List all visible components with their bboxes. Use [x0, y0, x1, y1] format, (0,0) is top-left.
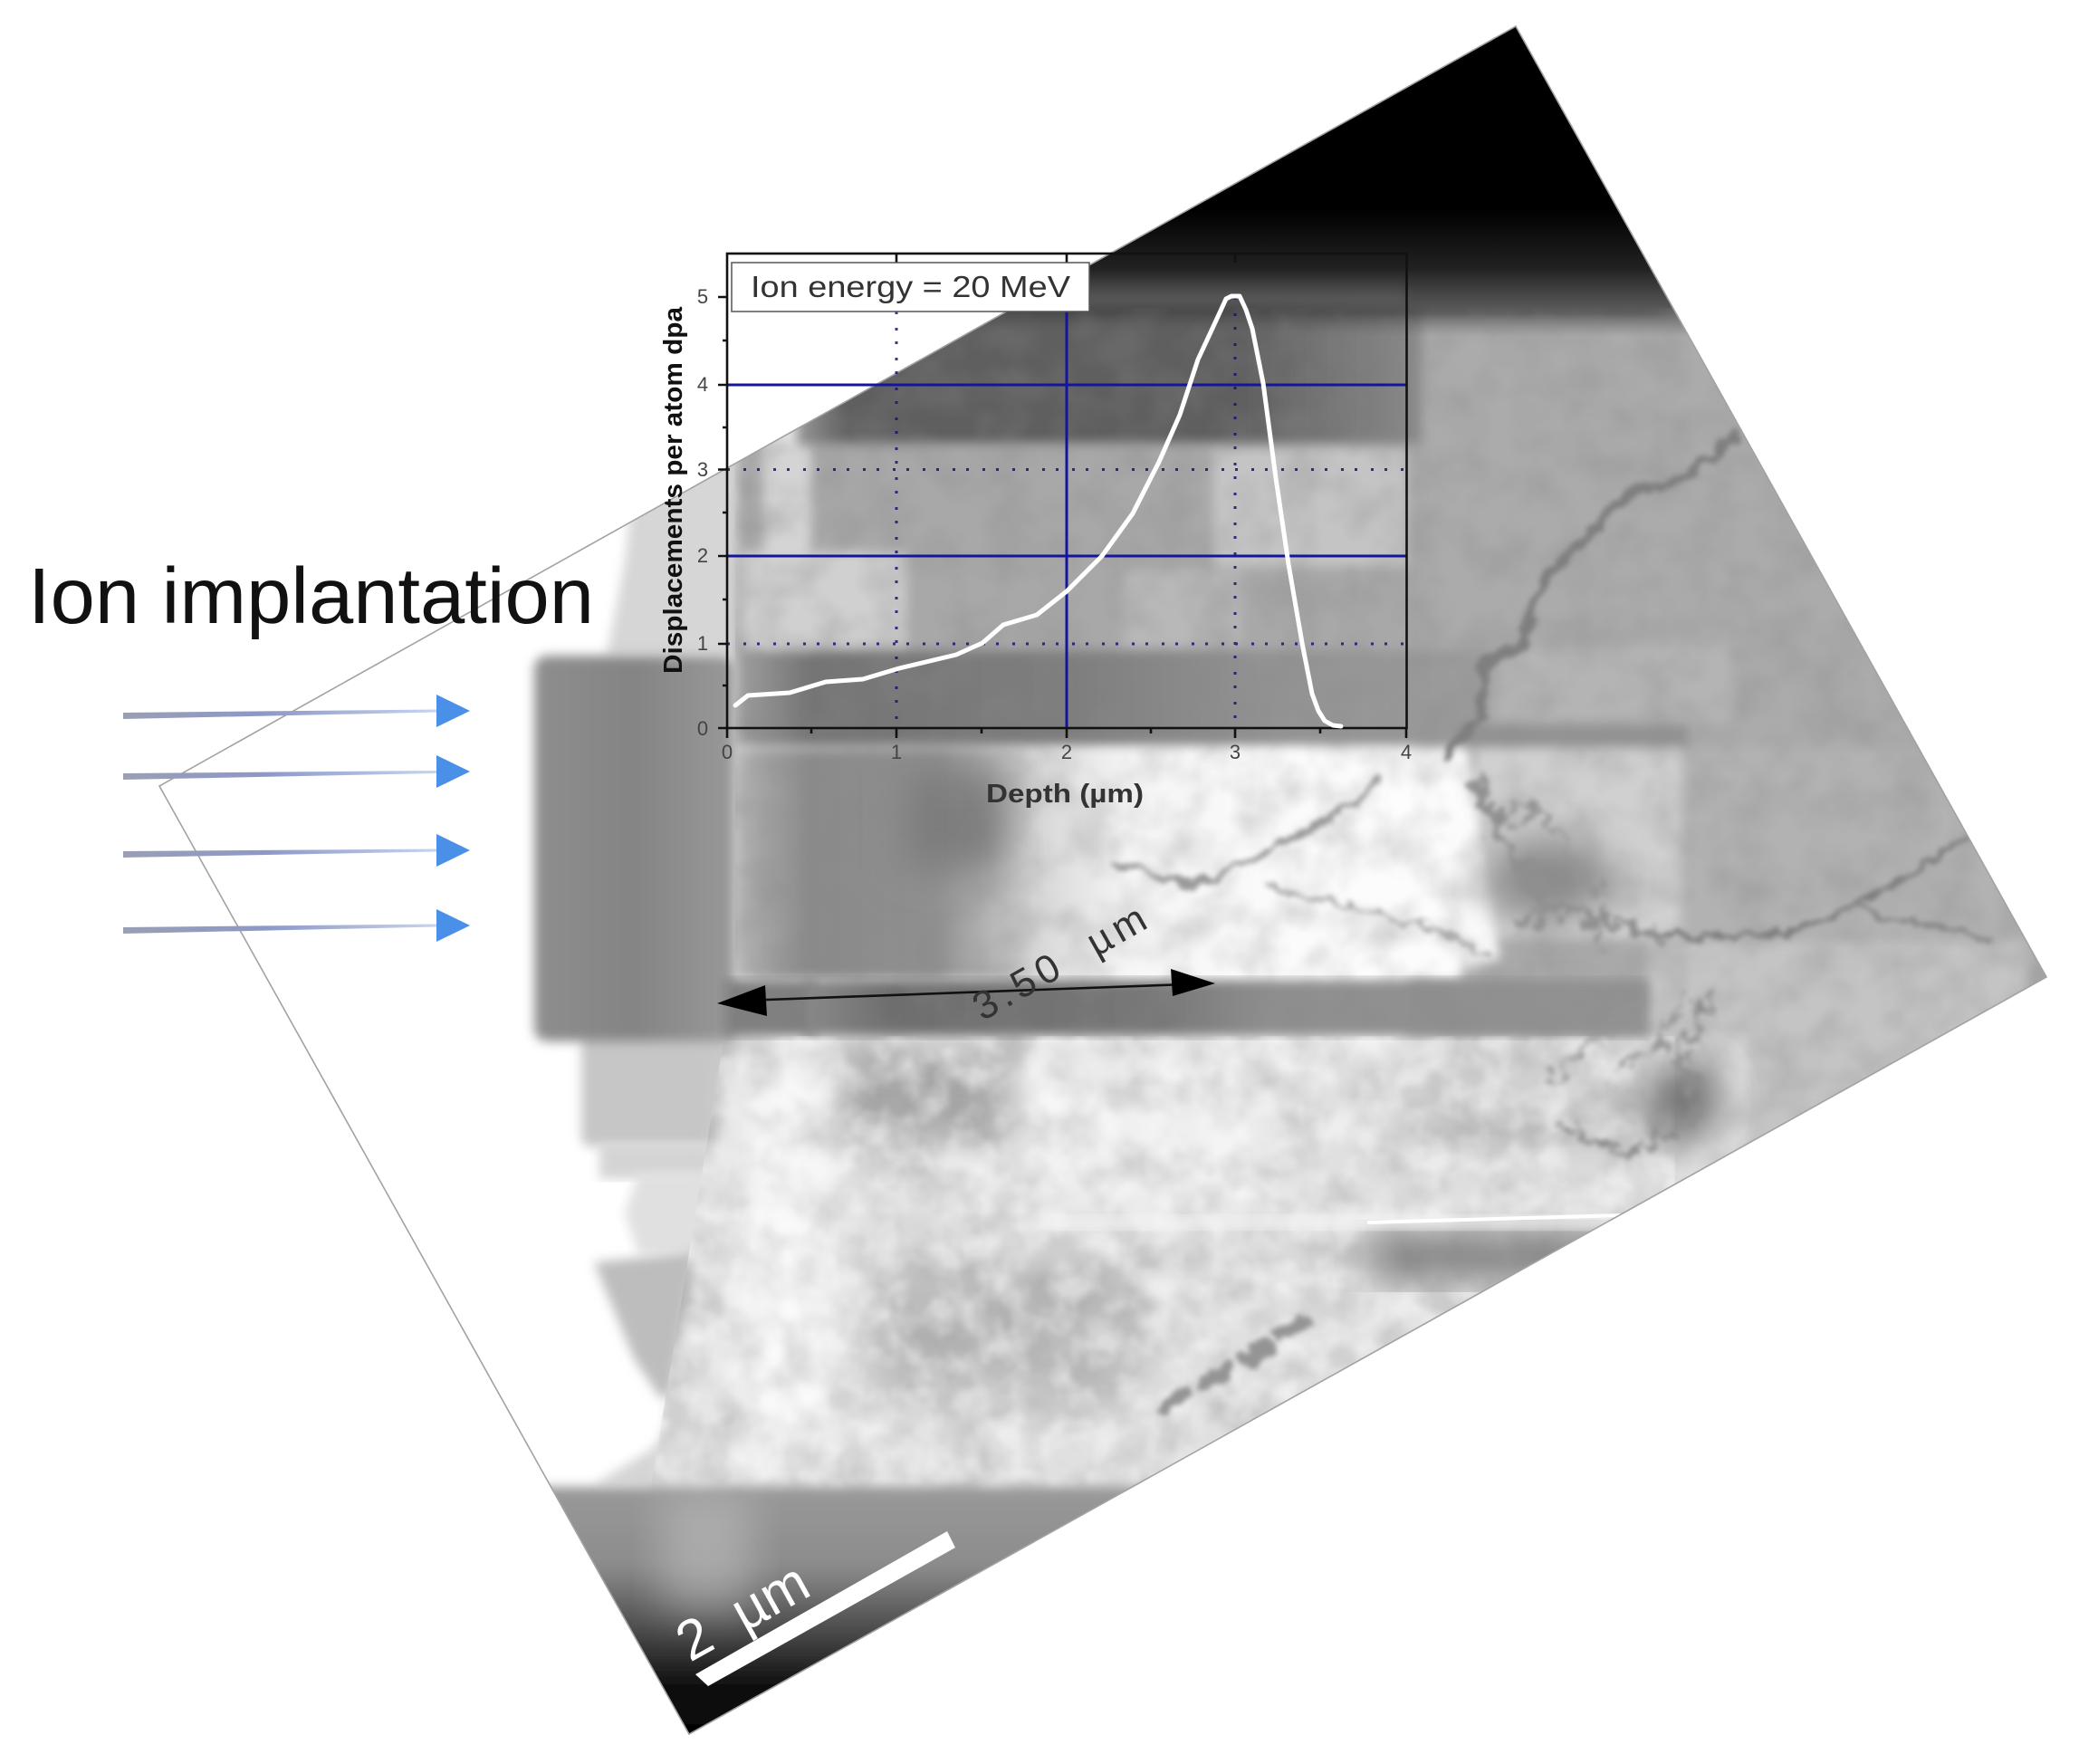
top dark gradient: [993, 27, 1686, 333]
x axis tick labels: 4: [1401, 741, 1412, 763]
arrow 1: [123, 695, 470, 727]
ion energy label: [732, 263, 1089, 312]
y axis tick labels: 5: [697, 285, 708, 308]
grey layer stripe: [806, 980, 1648, 1036]
arrow 2: [123, 755, 470, 788]
arrow 3: [123, 834, 470, 867]
measurement value: 3.50 µm: [965, 896, 1154, 1030]
measurement arrow: [717, 969, 1215, 1016]
lower dark gradient: [549, 1480, 1141, 1733]
soft lower patches: [742, 770, 1684, 1458]
y axis title: Displacements per atom dpa: [659, 306, 688, 674]
dislocation blobs: [1485, 838, 1722, 1138]
platinum cap: [534, 656, 735, 1041]
damage profile curve: [735, 296, 1341, 726]
x axis tick labels: 1: [891, 741, 902, 763]
scale bar rectangle: [695, 1531, 955, 1686]
chart grid lines: [727, 297, 1406, 728]
platinum cap and left layers: [581, 444, 753, 1490]
bright streak and dark patch: [1041, 1215, 1621, 1279]
3.50 µm depth measurement: [717, 896, 1215, 1030]
ion energy label: Ion energy = 20 MeV: [751, 270, 1070, 303]
y axis tick labels: 0: [697, 717, 708, 740]
y axis tick labels: 2: [697, 544, 708, 567]
y axis tick labels: [697, 285, 708, 740]
y axis tick labels: 4: [697, 373, 708, 396]
x axis tick labels: 2: [1061, 741, 1072, 763]
y axis tick labels: 1: [697, 632, 708, 655]
micrograph tonal bands: [649, 272, 2079, 1503]
bushy dislocation network: [1474, 780, 1712, 1155]
arrow 4: [123, 909, 470, 942]
y axis tick labels: 3: [697, 458, 708, 481]
heading: ion implantation: Ion implantation: [28, 552, 594, 640]
x axis tick labels: 3: [1230, 741, 1241, 763]
mottled grain texture: [652, 309, 2045, 1488]
x axis title: Depth (µm): [986, 780, 1144, 809]
scale bar: [666, 1531, 955, 1686]
dislocation cracks: [1114, 436, 1992, 1405]
chart axes and ticks: [718, 254, 1407, 738]
x axis tick labels: 0: [722, 741, 733, 763]
displacement per atom chart: [659, 254, 1412, 809]
ion beam arrows: [123, 695, 470, 942]
x axis tick labels: [722, 741, 1412, 763]
scale bar label: 2 µm: [666, 1550, 819, 1673]
